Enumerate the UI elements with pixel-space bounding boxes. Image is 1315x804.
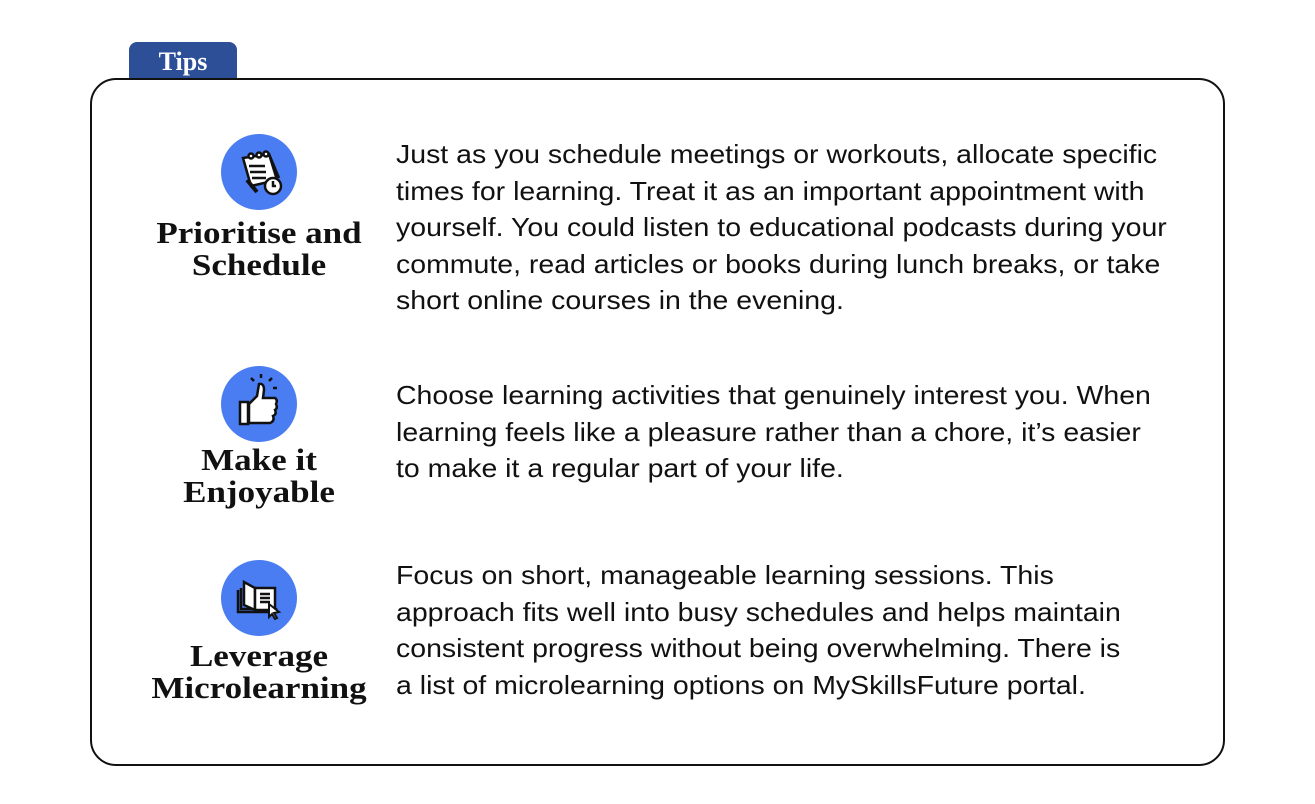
text block: microlearning: approach fits well into busy schedules and helps maintain — [396, 596, 1121, 626]
text block: microlearning — [396, 560, 1121, 700]
heading: Make it Enjoyable: Make it — [201, 442, 317, 477]
heading: Leverage Microlearning: Leverage — [190, 638, 328, 673]
heading: Leverage Microlearning: Microlearning — [151, 670, 367, 705]
text block: prioritise: yourself. You could listen to educational podcasts during your — [396, 212, 1167, 242]
icon: calendar — [221, 134, 297, 210]
heading: Leverage Microlearning — [151, 638, 367, 705]
text block: prioritise: Just as you schedule meetings or workouts, allocate specific — [396, 139, 1157, 169]
text block: enjoyable: learning feels like a pleasure rather than a chore, it’s easier — [396, 416, 1141, 446]
heading: Make it Enjoyable — [183, 442, 335, 509]
text block: microlearning: Focus on short, manageable learning sessions. This — [396, 560, 1054, 590]
heading: Make it Enjoyable: Enjoyable — [183, 474, 335, 509]
text block: prioritise — [396, 139, 1167, 315]
text block: microlearning: a list of microlearning options on MySkillsFuture portal. — [396, 670, 1086, 700]
heading: Prioritise and Schedule: Schedule — [192, 247, 326, 282]
text block: enjoyable: Choose learning activities that genuinely interest you. When — [396, 380, 1151, 410]
icon: thumbs up — [221, 366, 297, 442]
text block: prioritise: short online courses in the evening. — [396, 285, 844, 315]
heading: Prioritise and Schedule — [156, 215, 362, 282]
icon: book — [221, 560, 297, 636]
tab: Tips — [129, 42, 237, 79]
heading: Prioritise and Schedule: Prioritise and — [156, 215, 362, 250]
text block: enjoyable: to make it a regular part of your life. — [396, 453, 844, 483]
text block: prioritise: times for learning. Treat it as an important appointment with — [396, 176, 1145, 206]
tab: Tips: Tips — [159, 47, 207, 76]
text block: prioritise: commute, read articles or books during lunch breaks, or take — [396, 248, 1160, 278]
text block: enjoyable — [396, 380, 1151, 483]
panel: tips box — [90, 78, 1225, 766]
text block: microlearning: consistent progress without being overwhelming. There is — [396, 633, 1120, 663]
